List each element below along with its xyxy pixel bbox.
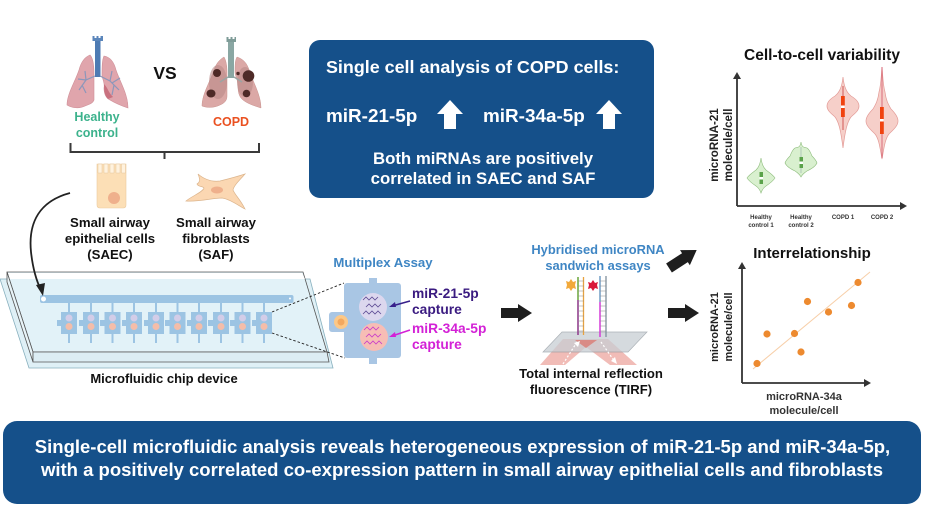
text: SAEC label: Small airway bbox=[70, 215, 151, 230]
zoom guide lines bbox=[272, 283, 345, 358]
icon: fibroblast bbox=[186, 174, 245, 209]
text: SAF label: Small airway bbox=[176, 215, 257, 230]
text: VS: VS bbox=[153, 63, 177, 83]
arrow: miR-21 pointer bbox=[389, 301, 410, 307]
text: COPD: COPD bbox=[213, 115, 249, 129]
x axis labels: COPD 2 bbox=[871, 215, 894, 221]
heading: panel title: Single cell analysis of COPD cells: bbox=[326, 57, 619, 77]
icon: healthy lungs bbox=[67, 36, 128, 108]
text: Hybridised microRNA sandwich assays: sandwich assays bbox=[545, 258, 651, 273]
violin: healthy control 2 bbox=[785, 142, 817, 177]
y axis label: microRNA-21 bbox=[708, 108, 721, 182]
heading: Cell-to-cell variability: Cell-to-cell variability bbox=[744, 47, 900, 64]
multiplex assay chamber bbox=[329, 278, 401, 364]
y axis label: microRNA-21 bbox=[709, 292, 721, 362]
microfluidic chip device bbox=[0, 272, 333, 368]
TIRF diagram bbox=[540, 276, 647, 365]
violin: COPD 1 bbox=[827, 77, 859, 148]
text: SAF label: fibroblasts bbox=[182, 231, 250, 246]
panel: conclusion banner bbox=[3, 421, 921, 504]
icon: up arrow miR-21 bbox=[437, 100, 463, 129]
text: correlation note: Both miRNAs are positively bbox=[373, 149, 594, 168]
text: SAF label: (SAF) bbox=[198, 247, 234, 262]
y axis label: molecule/cell bbox=[722, 109, 735, 181]
x axis labels: control 1 bbox=[748, 223, 774, 229]
text: miR-21-5p: miR-21-5p bbox=[326, 106, 417, 127]
x axis labels: control 2 bbox=[788, 223, 814, 229]
x axis label: microRNA-34a bbox=[766, 391, 843, 403]
text: conclusion: with a positively correlated co-expression pattern in small airway epithelial cells and fibroblasts bbox=[40, 459, 883, 480]
bracket bbox=[70, 143, 259, 159]
arrow: to interrelationship chart bbox=[668, 304, 699, 322]
x axis labels: COPD 1 bbox=[832, 215, 855, 221]
arrow: cells into chip bbox=[31, 193, 70, 296]
text: Multiplex Assay: Multiplex Assay bbox=[333, 255, 433, 270]
x axis labels: Healthy bbox=[790, 215, 812, 221]
panel: single cell analysis bbox=[309, 40, 654, 198]
x axis label: molecule/cell bbox=[769, 405, 839, 417]
arrow: chamber to sandwich assay bbox=[501, 304, 532, 322]
icon: up arrow miR-34a bbox=[596, 100, 622, 129]
text: conclusion: Single-cell microfluidic analysis reveals heterogeneous expression of miR-21-5p and miR-34a-5p, bbox=[35, 436, 890, 457]
y axis label: molecule/cell bbox=[723, 292, 735, 362]
heading: Interrelationship: Interrelationship bbox=[753, 245, 871, 262]
text: miR-21-5p capture: capture bbox=[412, 302, 462, 317]
arrow: to variability chart bbox=[664, 242, 702, 276]
chart: violin plot bbox=[708, 67, 907, 229]
arrow: miR-34a pointer bbox=[389, 330, 410, 337]
violin: healthy control 1 bbox=[747, 158, 775, 193]
text: Healthy control: control bbox=[76, 126, 118, 140]
violin: COPD 2 bbox=[866, 67, 898, 159]
text: miR-34a-5p: miR-34a-5p bbox=[483, 106, 585, 127]
text: correlation note: correlated in SAEC and SAF bbox=[371, 169, 595, 188]
text: miR-34a-5p capture: miR-34a-5p bbox=[412, 321, 486, 336]
text: SAEC label: (SAEC) bbox=[87, 247, 133, 262]
chart: scatter plot bbox=[709, 262, 871, 417]
text: Microfluidic chip device: Microfluidic chip device bbox=[90, 371, 238, 386]
x axis labels: Healthy bbox=[750, 215, 772, 221]
icon: COPD lungs bbox=[202, 37, 261, 108]
icon: epithelial cell bbox=[97, 164, 126, 208]
text: miR-34a-5p capture: capture bbox=[412, 337, 462, 352]
text: miR-21-5p capture: miR-21-5p bbox=[412, 286, 479, 301]
text: SAEC label: epithelial cells bbox=[65, 231, 155, 246]
text: TIRF label: Total internal reflection bbox=[519, 366, 663, 381]
text: Hybridised microRNA sandwich assays: Hybridised microRNA bbox=[531, 242, 665, 257]
text: TIRF label: fluorescence (TIRF) bbox=[530, 382, 652, 397]
text: Healthy control: Healthy bbox=[74, 110, 120, 124]
